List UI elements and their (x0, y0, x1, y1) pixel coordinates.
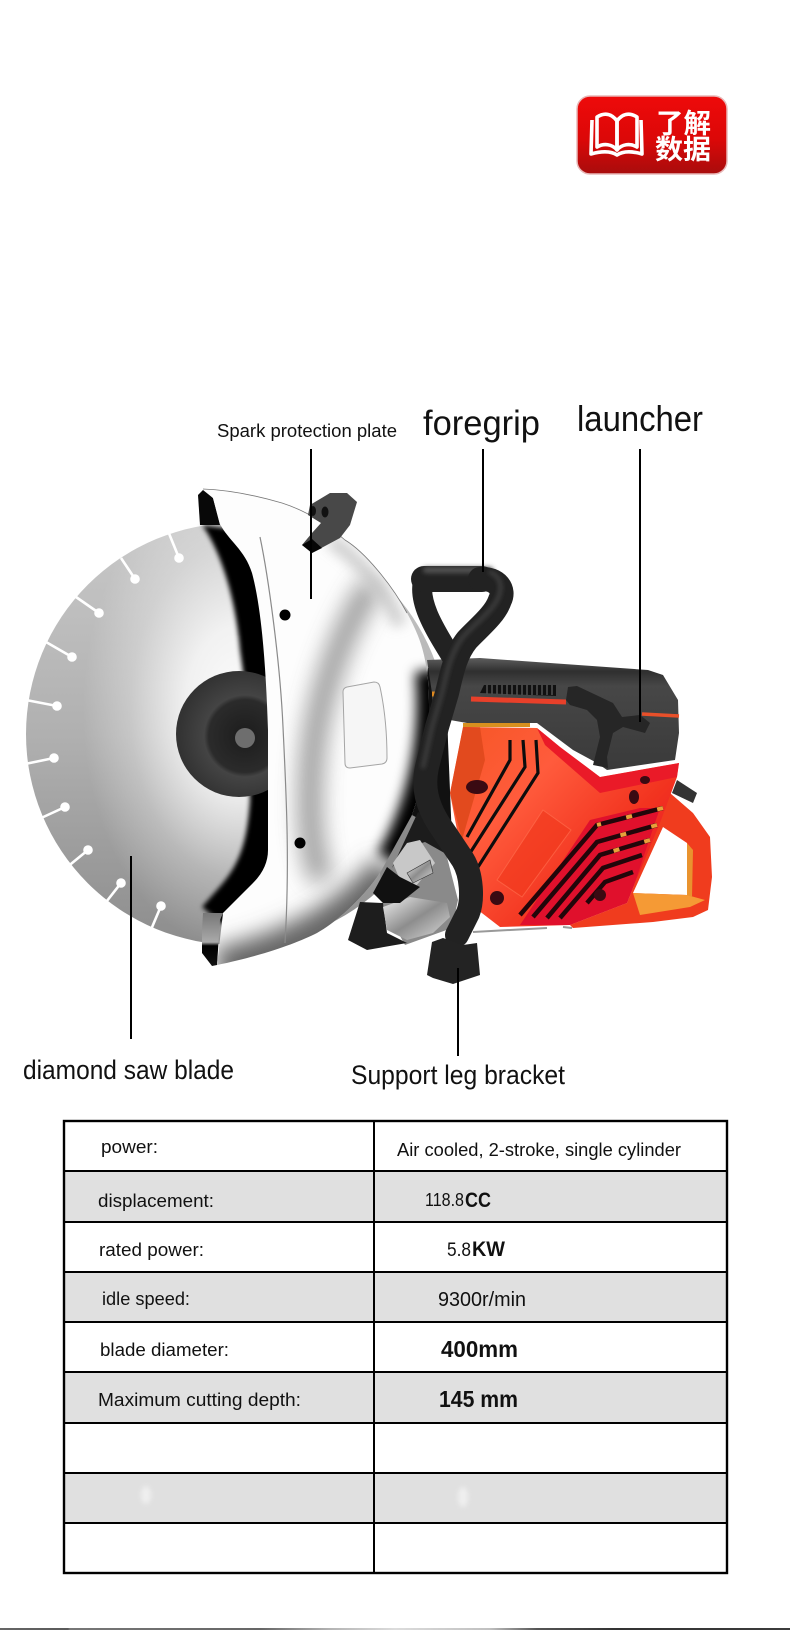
row: power: Air cooled, 2-stroke, single cylinder (397, 1140, 681, 1160)
guard bottom lip (202, 913, 223, 966)
cover label panel (497, 810, 571, 897)
row: displacement: 118.8 (425, 1190, 464, 1210)
row: rated power: 5.8 (447, 1240, 471, 1261)
red engine cover (450, 727, 679, 927)
table grid (64, 1121, 727, 1573)
guard adjustment grip (302, 493, 357, 553)
icon: open book (591, 114, 642, 155)
row: displacement (98, 1189, 491, 1212)
row: maximum cutting depth (98, 1386, 518, 1412)
spark protection plate guard (203, 489, 434, 975)
blade hub (176, 671, 302, 797)
row: rated power: KW (472, 1238, 505, 1261)
row: blade diameter: 400mm (441, 1336, 518, 1362)
lower mechanism (348, 812, 458, 950)
row: idle speed: 9300r/min (438, 1289, 526, 1311)
label: support leg bracket: Support leg bracket (351, 1060, 565, 1090)
row: rated power (99, 1238, 505, 1261)
left cooling slats (467, 740, 538, 867)
label: launcher: launcher (577, 398, 703, 439)
badge: learn the data (577, 96, 727, 174)
row: idle speed: idle speed: (102, 1289, 190, 1309)
guard top lip (198, 490, 220, 525)
engine housing (427, 658, 679, 770)
table row shading (64, 1171, 727, 1523)
row: maximum cutting depth: Maximum cutting depth: (98, 1390, 301, 1410)
row: idle speed (102, 1289, 526, 1311)
right cooling slats (520, 808, 663, 918)
under rail (473, 927, 572, 932)
housing stripes (471, 699, 566, 702)
cover holes (466, 776, 650, 905)
illustration: cut-off saw (25, 489, 712, 984)
support leg foot (427, 938, 480, 984)
guard window (343, 682, 387, 768)
bottom gradient bar (0, 1628, 790, 1630)
row: power (101, 1137, 681, 1160)
label: diamond saw blade: diamond saw blade (23, 1055, 234, 1085)
label: foregrip: foregrip (423, 404, 540, 443)
row: displacement: displacement: (98, 1191, 214, 1211)
row: rated power: rated power: (99, 1240, 204, 1260)
label: spark protection plate: Spark protection plate (217, 421, 397, 441)
badge text (655, 109, 711, 165)
row: maximum cutting depth: 145 mm (439, 1386, 518, 1412)
rear engine shadow (395, 668, 452, 880)
guard seam (260, 537, 287, 943)
badge text: 数据 (655, 135, 711, 165)
diamond saw blade (25, 523, 448, 945)
row: displacement: CC (465, 1189, 491, 1212)
row: blade diameter: blade diameter: (100, 1340, 229, 1360)
guard bolt holes (280, 610, 306, 848)
starter handle (566, 686, 650, 768)
row: power: power: (101, 1137, 158, 1157)
badge text: 了解 (656, 109, 711, 139)
specification table (64, 1121, 727, 1573)
guard groove shadow (202, 525, 290, 930)
rear handle (570, 780, 712, 928)
row: blade diameter (100, 1336, 518, 1362)
housing vent (480, 685, 556, 696)
front handle (422, 570, 502, 935)
